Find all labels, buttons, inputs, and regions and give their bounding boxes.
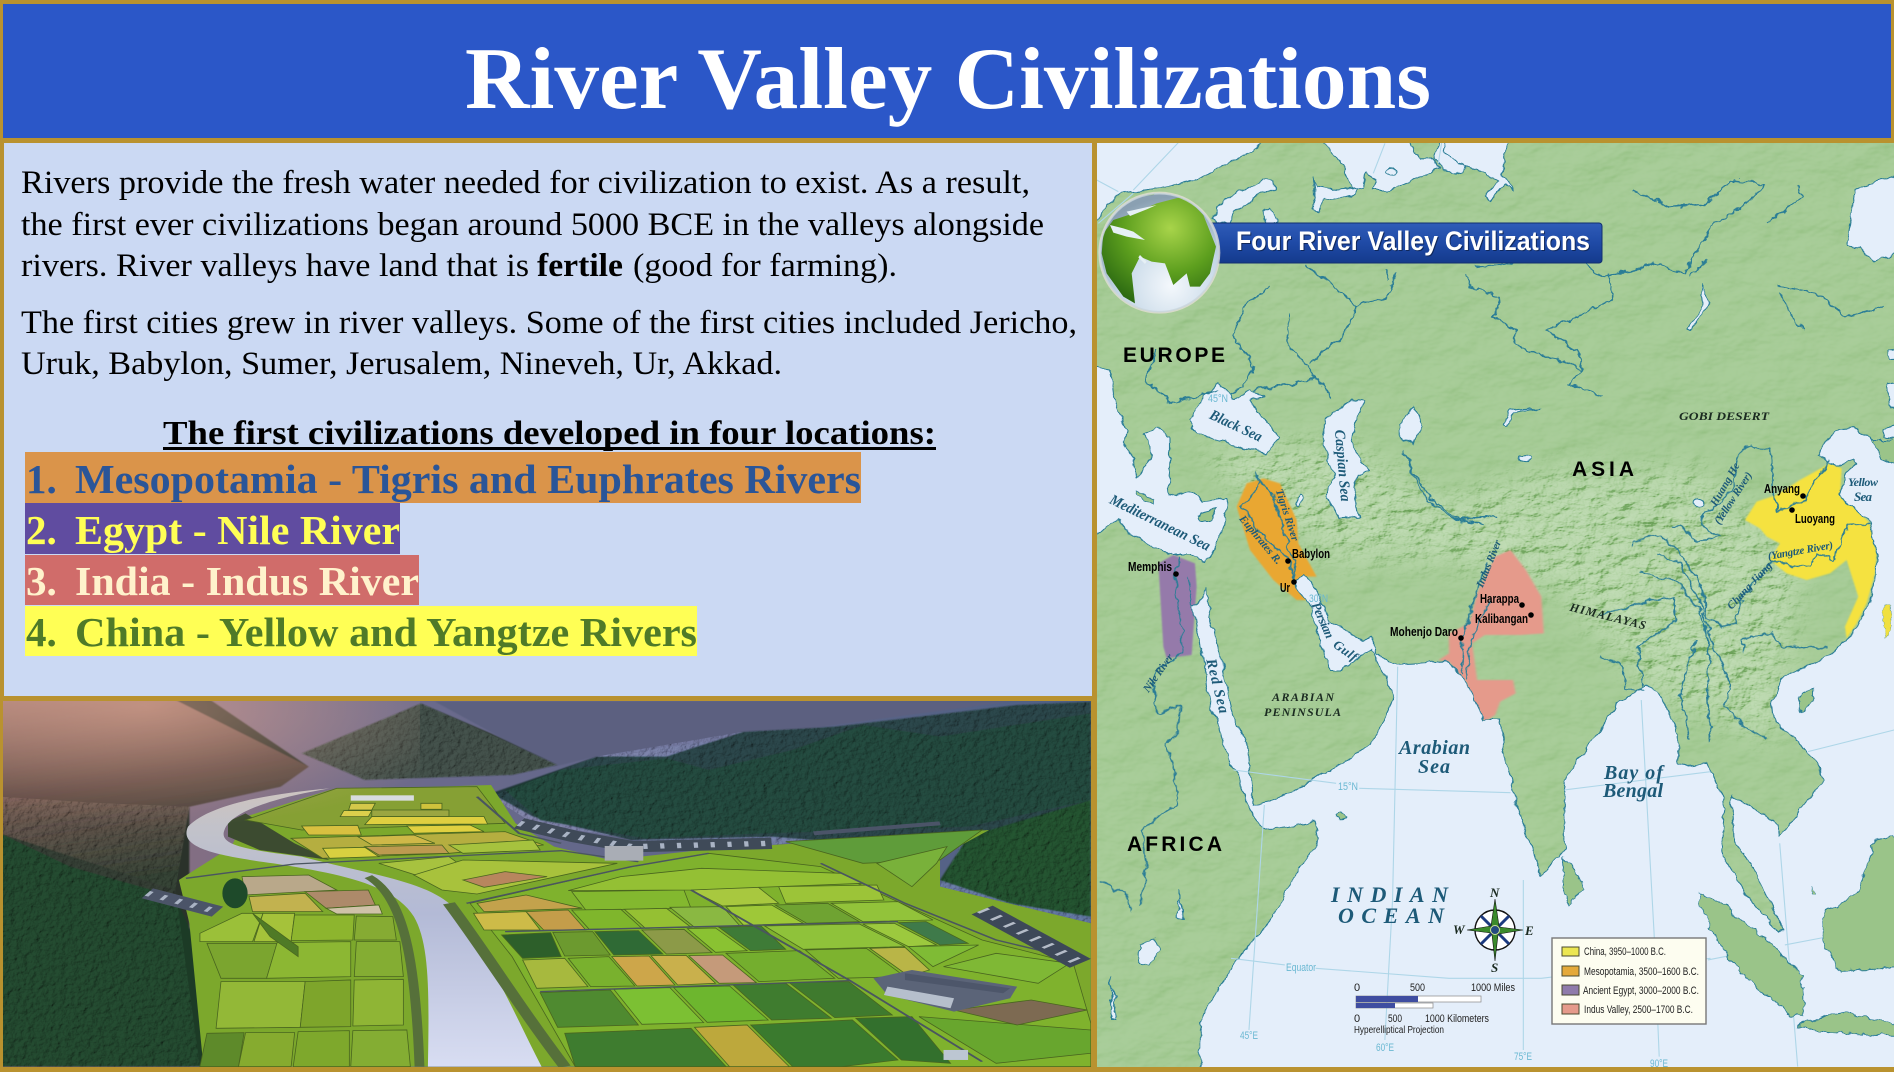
sub: legend: Ancient Egypt, 3000–2000 B.C. (1583, 985, 1699, 997)
list item: India: India - Indus River (75, 558, 419, 604)
sub: water labels: Arabian (1397, 737, 1470, 759)
paragraph: rivers and fertile land: rivers. River valleys have land that is (21, 248, 529, 284)
sub: river bank trees (449, 903, 565, 1067)
sub: rivers (1098, 180, 1885, 910)
sub: river labels: (Yellow River) (1712, 470, 1755, 527)
sub: graticule labels: Equator (1286, 962, 1316, 974)
sub: graticule labels: 45°N (1208, 393, 1228, 405)
sub: graticule labels: 15°N (1338, 781, 1358, 793)
icon: compass rose: W (1453, 922, 1466, 937)
paragraph: first cities: Uruk, Babylon, Sumer, Jerusalem, Nineveh, Ur, Akkad. (21, 346, 782, 382)
sub: right fields (470, 830, 1091, 1067)
sub: map title banner: Four River Valley Civilizations (1236, 226, 1590, 256)
sub: region labels: ARABIAN (1271, 690, 1335, 704)
sub: continent labels: ASIA (1572, 458, 1634, 481)
sub: graticule labels (1208, 393, 1668, 1070)
sub: scale bar: 1000 Miles (1471, 982, 1515, 994)
paragraph: rivers and fertile land: the first ever civilizations began around 5000 BCE in the valleys alongside (21, 207, 1044, 243)
sub: region labels: GOBI DESERT (1679, 409, 1770, 423)
sub: scale bar: 0 (1354, 982, 1360, 994)
sub: water labels: Bay of (1603, 762, 1665, 784)
sub: roads (186, 797, 1066, 1062)
sub: city markers and labels: Babylon (1292, 546, 1330, 561)
sub: legend (1552, 938, 1706, 1024)
icon: globe (1098, 189, 1220, 314)
sub: graticule lines (1097, 143, 1894, 1067)
list item: Mesopotamia: Mesopotamia - Tigris and Euphrates Rivers (75, 456, 861, 502)
paragraph: rivers and fertile land: fertile (537, 248, 623, 284)
vertical divider (1092, 140, 1097, 1070)
sub: valley floor (179, 785, 1091, 1067)
sub: water labels: Yellow (1848, 475, 1879, 489)
sub: scale bar: 500 (1388, 1013, 1402, 1025)
sub: water labels: Gulf (1331, 637, 1362, 665)
icon: compass rose: S (1491, 960, 1498, 975)
sub: water labels (1106, 407, 1879, 928)
sub: water labels: Mediterranean Sea (1106, 492, 1213, 555)
sub: graticule labels: 30°N (1309, 593, 1328, 605)
sub: far fields (246, 787, 617, 894)
sub: map title banner: Four River Valley Civilizations (1237, 227, 1591, 257)
divider under header (0, 138, 1894, 143)
sub: Mediterranean Sea (1087, 360, 1302, 562)
sub: scale bar (1354, 982, 1515, 1036)
sub: graticule labels: 60°E (1376, 1042, 1394, 1054)
sub: map title banner (1200, 223, 1602, 263)
sub: scale bar: Hyperelliptical Projection (1354, 1025, 1444, 1036)
list item: China: 4. (26, 609, 57, 655)
sub: water labels: Bengal (1602, 780, 1663, 802)
sub: civilisation area China (1745, 463, 1877, 638)
sub: scale bar: 500 (1410, 982, 1425, 994)
sub: city markers and labels: Ur (1280, 580, 1290, 595)
sub: water labels: Persian (1309, 600, 1338, 641)
sub: river labels: Nile River (1140, 651, 1176, 696)
sub: region labels: HIMALAYAS (1567, 600, 1648, 632)
list item: India: 3. (26, 558, 57, 604)
paragraph: rivers and fertile land (21, 165, 1044, 284)
sub: river labels: Chang Jiang (1725, 560, 1775, 612)
paragraph: first cities: The first cities grew in river valleys. Some of the first cities included Jericho, (21, 305, 1077, 341)
sub: water labels: Sea (1854, 489, 1872, 504)
sub: water labels: Caspian Sea (1331, 429, 1353, 503)
sub: village buildings (147, 795, 1080, 963)
subheading: The first civilizations developed in four locations: (163, 415, 936, 452)
sub: river labels (1140, 461, 1834, 696)
sub: left fields (200, 875, 410, 1067)
list item: Mesopotamia: 1. (26, 456, 57, 502)
sub: continent labels: AFRICA (1127, 833, 1222, 856)
sub: civilisation area Mesopotamia (1237, 478, 1317, 600)
list item: Egypt: Egypt - Nile River (75, 507, 400, 553)
sub: civilisation area Egypt (1158, 555, 1197, 658)
sub: city markers and labels: Luoyang (1795, 511, 1835, 526)
sub: region labels (1264, 409, 1770, 719)
icon: compass rose: E (1524, 923, 1534, 938)
icon: compass rose (1453, 885, 1534, 975)
paragraph: first cities (21, 305, 1077, 382)
list item: China: China - Yellow and Yangtze Rivers (75, 609, 697, 655)
header banner (3, 4, 1891, 138)
sub: graticule labels: 90°E (1650, 1058, 1668, 1070)
sub: mountains (0, 700, 1091, 1067)
paragraph: rivers and fertile land: Rivers provide the fresh water needed for civilization to exist. As a result, (21, 165, 1030, 201)
sub: city markers and labels: Harappa (1480, 591, 1520, 606)
sub: civilisation area Indus (1439, 550, 1544, 722)
sub: river labels: Euphrates R. (1236, 512, 1284, 567)
sub: legend: China, 3950–1000 B.C. (1584, 946, 1666, 958)
sub: scale bar: 0 (1354, 1013, 1360, 1025)
sub: graticule labels: 45°E (1240, 1030, 1258, 1042)
sub: Indian Ocean and Red Sea (1188, 428, 1894, 1072)
sub: islands and lakes (1111, 440, 1894, 1037)
sub: city markers and labels: Kalibangan (1475, 611, 1528, 626)
sub: river labels: (Yangtze River) (1767, 539, 1834, 563)
panel: introduction text (4, 143, 1092, 696)
sub: city markers and labels: Memphis (1128, 559, 1172, 574)
divider above photo (0, 696, 1096, 701)
sub: continent labels (1123, 344, 1634, 856)
sub: water labels: Sea (1418, 756, 1450, 778)
sub: seas and oceans (1060, 120, 1894, 1072)
sub: river labels: Huang He (1708, 461, 1743, 509)
sub: water labels: Black Sea (1206, 407, 1265, 446)
sub: city markers and labels (1128, 481, 1835, 641)
sub: water labels: INDIAN (1330, 882, 1449, 907)
sub: city markers and labels: Mohenjo Daro (1390, 624, 1458, 639)
sub: forest texture (0, 700, 1094, 1070)
sub: river labels: Tigris River (1273, 488, 1301, 543)
title: River Valley Civilizations (465, 31, 1431, 128)
list item: Egypt: 2. (26, 507, 57, 553)
sub: city markers and labels: Anyang (1764, 481, 1800, 496)
sub: legend: Mesopotamia, 3500–1600 B.C. (1584, 966, 1699, 978)
sub: terrain relief (1096, 142, 1894, 1067)
sub: river (186, 788, 542, 1067)
panel: map of four river valley civilizations (1060, 120, 1894, 1072)
sub: water labels: OCEAN (1338, 903, 1445, 928)
sub: farm barn (873, 970, 1017, 1012)
paragraph: rivers and fertile land: (good for farming). (633, 248, 897, 284)
sub: continent labels: EUROPE (1123, 344, 1225, 367)
sub: river labels: Indus River (1474, 538, 1504, 590)
sub: scale bar: 1000 Kilometers (1425, 1013, 1489, 1025)
icon: compass rose: N (1489, 885, 1500, 900)
sub: legend: Indus Valley, 2500–1700 B.C. (1584, 1004, 1693, 1016)
sub: region labels: PENINSULA (1264, 705, 1341, 719)
sub: graticule labels: 75°E (1514, 1051, 1532, 1063)
photo: river valley farmland (0, 700, 1094, 1070)
sub: water labels: Red Sea (1202, 656, 1232, 716)
